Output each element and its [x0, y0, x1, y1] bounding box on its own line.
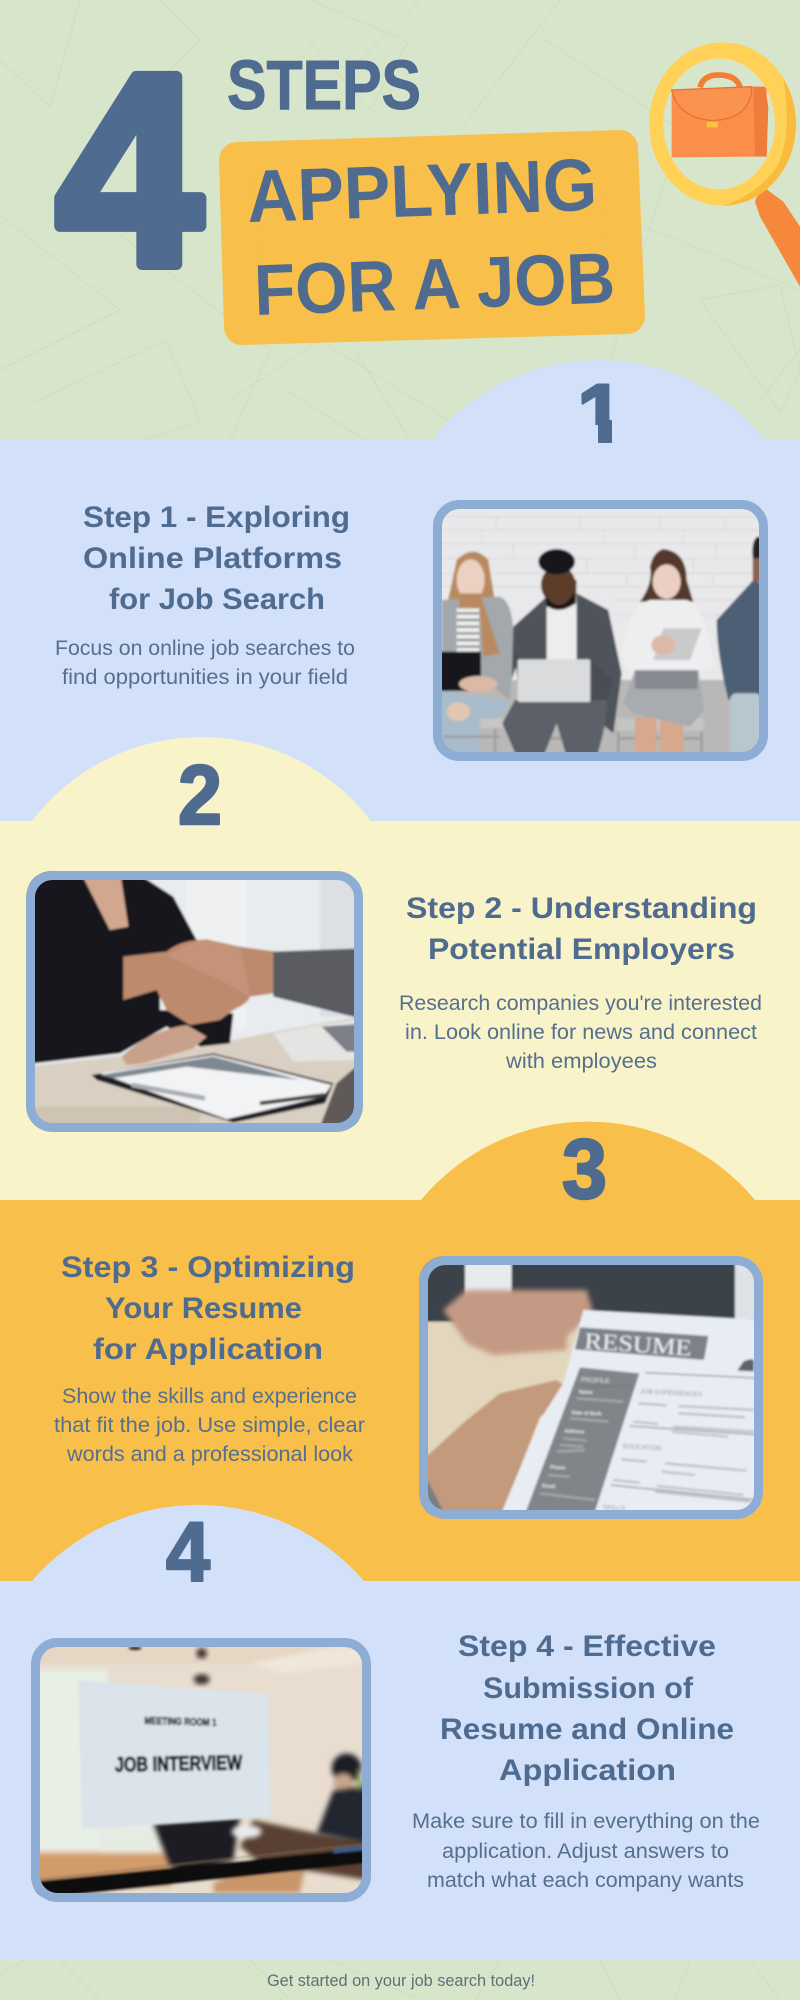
photo: resume handover: EDUCATION [623, 1443, 662, 1452]
step number 2: 2 [178, 748, 222, 842]
photo: handshake [26, 871, 363, 1131]
heading: step 4: Application [499, 1754, 676, 1787]
photo: resume handover: Phone [550, 1465, 566, 1471]
title banner: applying for a job: FOR A JOB [253, 238, 616, 331]
heading: step 1 [83, 501, 350, 616]
panel: step 2 [0, 737, 800, 1220]
heading: step 4 [440, 1630, 734, 1787]
step number 1 [582, 384, 612, 443]
title banner: applying for a job [237, 143, 627, 331]
footer text: Get started on your job search today! [267, 1971, 535, 1990]
body text: step 4: match what each company wants [427, 1868, 744, 1892]
body text: step 2: with employees [505, 1049, 657, 1073]
photo: resume handover: Name [579, 1389, 593, 1396]
heading: step 2: Step 2 - Understanding [406, 892, 757, 925]
body text: step 4: Make sure to fill in everything on the [412, 1809, 760, 1833]
photo: resume handover [419, 1256, 763, 1517]
photo: resume handover: JOB EXPERIENCES [640, 1388, 703, 1399]
heading: step 1: Step 1 - Exploring [83, 501, 350, 534]
photo: resume handover: SKILLS [603, 1504, 626, 1513]
photo: candidates waiting [430, 497, 773, 760]
heading: step 1: Online Platforms [83, 542, 342, 575]
title banner: applying for a job: APPLYING [246, 143, 598, 238]
heading: step 4: Resume and Online [440, 1713, 734, 1746]
photo: resume handover: Email [542, 1483, 556, 1490]
photo: resume handover: Address [564, 1428, 585, 1435]
body text: step 2: Research companies you're interested [399, 991, 762, 1015]
body text: step 4 [412, 1809, 760, 1892]
panel: step 4 [0, 1505, 800, 1960]
body text: step 4: application. Adjust answers to [442, 1839, 729, 1863]
heading: step 3: for Application [93, 1333, 323, 1366]
panel: step 3 [0, 1122, 800, 1600]
body text: step 3: words and a professional look [66, 1442, 353, 1466]
title: STEPS: STEPS [227, 46, 421, 124]
body text: step 1 [55, 636, 355, 689]
body text: step 3 [54, 1384, 365, 1466]
heading: step 1: for Job Search [109, 583, 325, 616]
body text: step 1: find opportunities in your field [62, 665, 348, 689]
heading: step 4: Submission of [483, 1672, 694, 1705]
photo: job interview sign: JOB INTERVIEW [115, 1751, 243, 1777]
photo: job interview sign: MEETING ROOM 1 [144, 1716, 217, 1729]
heading: step 2 [406, 892, 757, 966]
step number 1: 1 [577, 367, 624, 461]
body text: step 1: Focus on online job searches to [55, 636, 355, 660]
photo: resume handover: Date of Birth [572, 1410, 602, 1418]
photo: job interview sign [31, 1638, 371, 1902]
step number 4: 4 [166, 1505, 210, 1599]
body text: step 2: in. Look online for news and connect [405, 1020, 757, 1044]
body text: step 3: that fit the job. Use simple, clear [54, 1413, 365, 1437]
heading: step 3: Step 3 - Optimizing [61, 1251, 355, 1284]
photo: resume handover: RESUME [584, 1328, 692, 1362]
panel: step 1 [0, 360, 800, 840]
title: big number 4: 4 [56, 18, 204, 322]
icon: magnifying glass with briefcase [649, 42, 800, 307]
heading: step 4: Step 4 - Effective [458, 1630, 716, 1663]
heading: step 3 [61, 1251, 355, 1366]
heading: step 3: Your Resume [105, 1292, 302, 1325]
body text: step 3: Show the skills and experience [62, 1384, 357, 1408]
step number 3: 3 [562, 1122, 607, 1216]
heading: step 2: Potential Employers [428, 933, 735, 966]
photo: resume handover: PROFILE [581, 1377, 610, 1385]
body text: step 2 [399, 991, 762, 1073]
